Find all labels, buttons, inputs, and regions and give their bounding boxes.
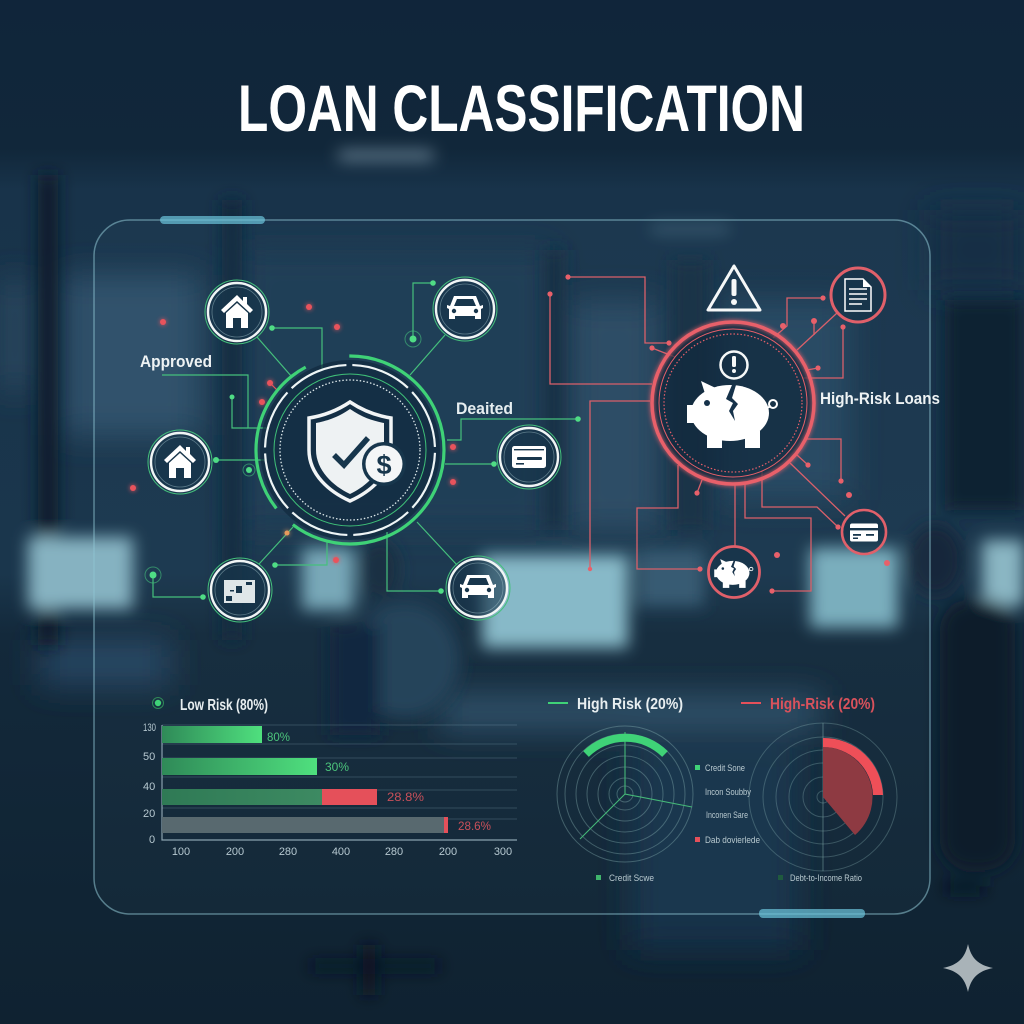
heading: high risk red: [741, 696, 875, 713]
icon: warning triangle: [708, 266, 760, 310]
radar legend: Incon Soubby: [705, 787, 751, 798]
icon: shield with check and dollar: [309, 402, 406, 501]
axis labels: 200: [439, 846, 457, 858]
icon: document: [831, 268, 885, 322]
icon: document card bottom left: [208, 558, 272, 622]
left radar chart: [548, 696, 693, 862]
radar legend: Dab dovierlede: [705, 835, 760, 846]
axis labels: 300: [494, 846, 512, 858]
label: approved: Approved: [140, 352, 212, 371]
axis labels: 130: [143, 722, 156, 734]
bar values: 80%: [267, 730, 290, 744]
icon: sparkle watermark: [943, 944, 993, 992]
radar legend: Credit Scwe: [609, 873, 654, 884]
axis labels: 100: [172, 846, 190, 858]
axis labels: 40: [143, 781, 155, 793]
high-risk loans network: [547, 266, 940, 598]
icon: credit card right: [497, 425, 561, 489]
icon: card small: [842, 510, 886, 554]
icon: broken piggy bank: [687, 381, 777, 448]
red connector nodes: [547, 274, 890, 594]
bar chart: [143, 697, 517, 858]
chart heading: [152, 697, 268, 714]
axis labels: 50: [143, 751, 155, 763]
radar legend: Credit Sone: [705, 763, 745, 774]
label: deaited: Deaited: [456, 399, 513, 418]
approved loans network: [130, 277, 581, 622]
axis labels: 0: [149, 834, 155, 846]
radar legend: [596, 763, 862, 884]
label: high-risk loans: High-Risk Loans: [820, 389, 940, 408]
red connector lines: [550, 277, 845, 591]
icon: exclamation circle: [720, 352, 748, 378]
glass panel: [94, 216, 930, 918]
radar legend: Inconen Sare: [706, 810, 748, 821]
central piggy bank hub: [651, 321, 815, 485]
green connector nodes: [145, 280, 581, 600]
bar values: 30%: [325, 760, 349, 774]
title: LOAN CLASSIFICATION: [238, 71, 805, 145]
bar values: [267, 730, 491, 833]
icon: house top left: [205, 280, 269, 344]
icon: car top right: [433, 277, 497, 341]
bars: [162, 726, 262, 743]
icon: car bottom right: [446, 556, 510, 620]
axis labels: 280: [385, 846, 403, 858]
chart heading: Low Risk (80%): [180, 697, 268, 714]
icon: piggy small: [708, 546, 760, 598]
axis labels: 200: [226, 846, 244, 858]
icon: house left: [148, 430, 212, 494]
heading: high risk green: High Risk (20%): [577, 696, 683, 713]
green connector lines: [153, 283, 578, 597]
icon: shield with check and dollar: $: [376, 450, 392, 480]
axis labels: 20: [143, 808, 155, 820]
central shield hub: [218, 318, 482, 582]
scattered red dots: [130, 304, 456, 563]
radar legend: Debt-to-Income Ratio: [790, 873, 862, 884]
bar values: 28.8%: [387, 790, 424, 804]
right radar chart: [741, 696, 897, 871]
axis labels: 400: [332, 846, 350, 858]
bar values: 28.6%: [458, 819, 491, 833]
axis labels: 280: [279, 846, 297, 858]
axis labels: [143, 722, 512, 858]
heading: high risk red: High-Risk (20%): [770, 696, 875, 713]
